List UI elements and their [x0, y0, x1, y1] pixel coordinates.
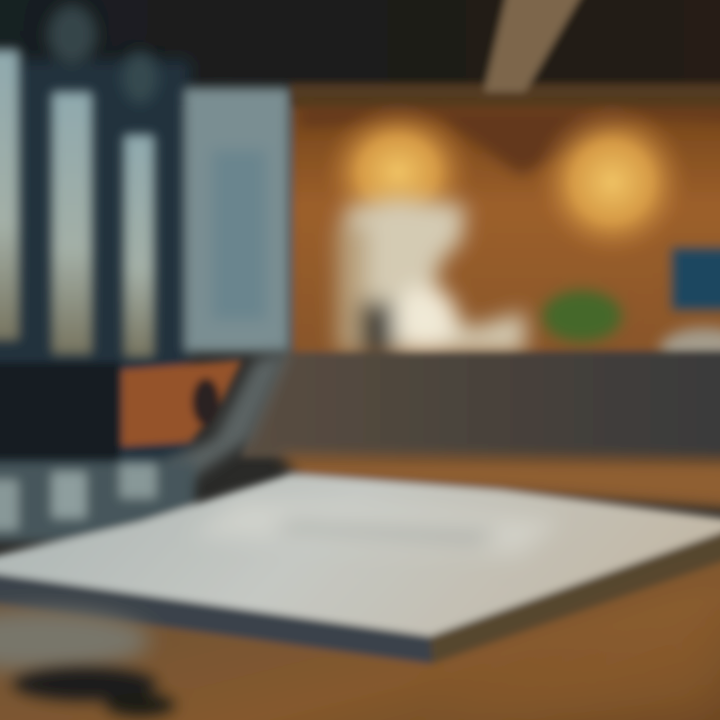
right wood highlight — [440, 590, 720, 720]
blue monitor — [672, 248, 720, 310]
wall lamp left — [320, 102, 476, 242]
dark chair gap — [192, 378, 220, 426]
wood desk base — [0, 550, 720, 720]
shadow under ledge — [300, 108, 720, 175]
dark foreground object — [13, 667, 175, 717]
background: dark ceiling — [0, 0, 720, 105]
white desk surface — [0, 474, 720, 636]
desk right edge — [430, 522, 720, 664]
window pane right — [124, 135, 154, 357]
window pane left — [0, 50, 19, 340]
paper detail on desk — [190, 500, 560, 555]
window pane middle — [52, 92, 92, 354]
green plant — [542, 290, 622, 342]
grey panel — [184, 88, 290, 352]
diagonal beam — [484, 0, 590, 92]
wood wall — [292, 105, 720, 360]
ceiling beam ledge — [290, 84, 720, 108]
desk front edge — [0, 568, 432, 664]
orange chair — [122, 360, 242, 446]
blurred white figure — [338, 198, 525, 354]
second ceiling blob — [122, 52, 158, 104]
grey foreground shadow left — [0, 610, 150, 670]
grey chair arm — [158, 350, 290, 492]
ceiling light blob — [48, 5, 96, 65]
pale object on right — [660, 328, 720, 372]
dark lower left cabinet — [0, 362, 120, 462]
sofa band — [240, 350, 720, 458]
warm reflection strip — [280, 455, 720, 510]
left wall and windows — [0, 5, 190, 480]
wall lamp right — [532, 102, 692, 262]
glass reflection strip left — [0, 462, 195, 542]
